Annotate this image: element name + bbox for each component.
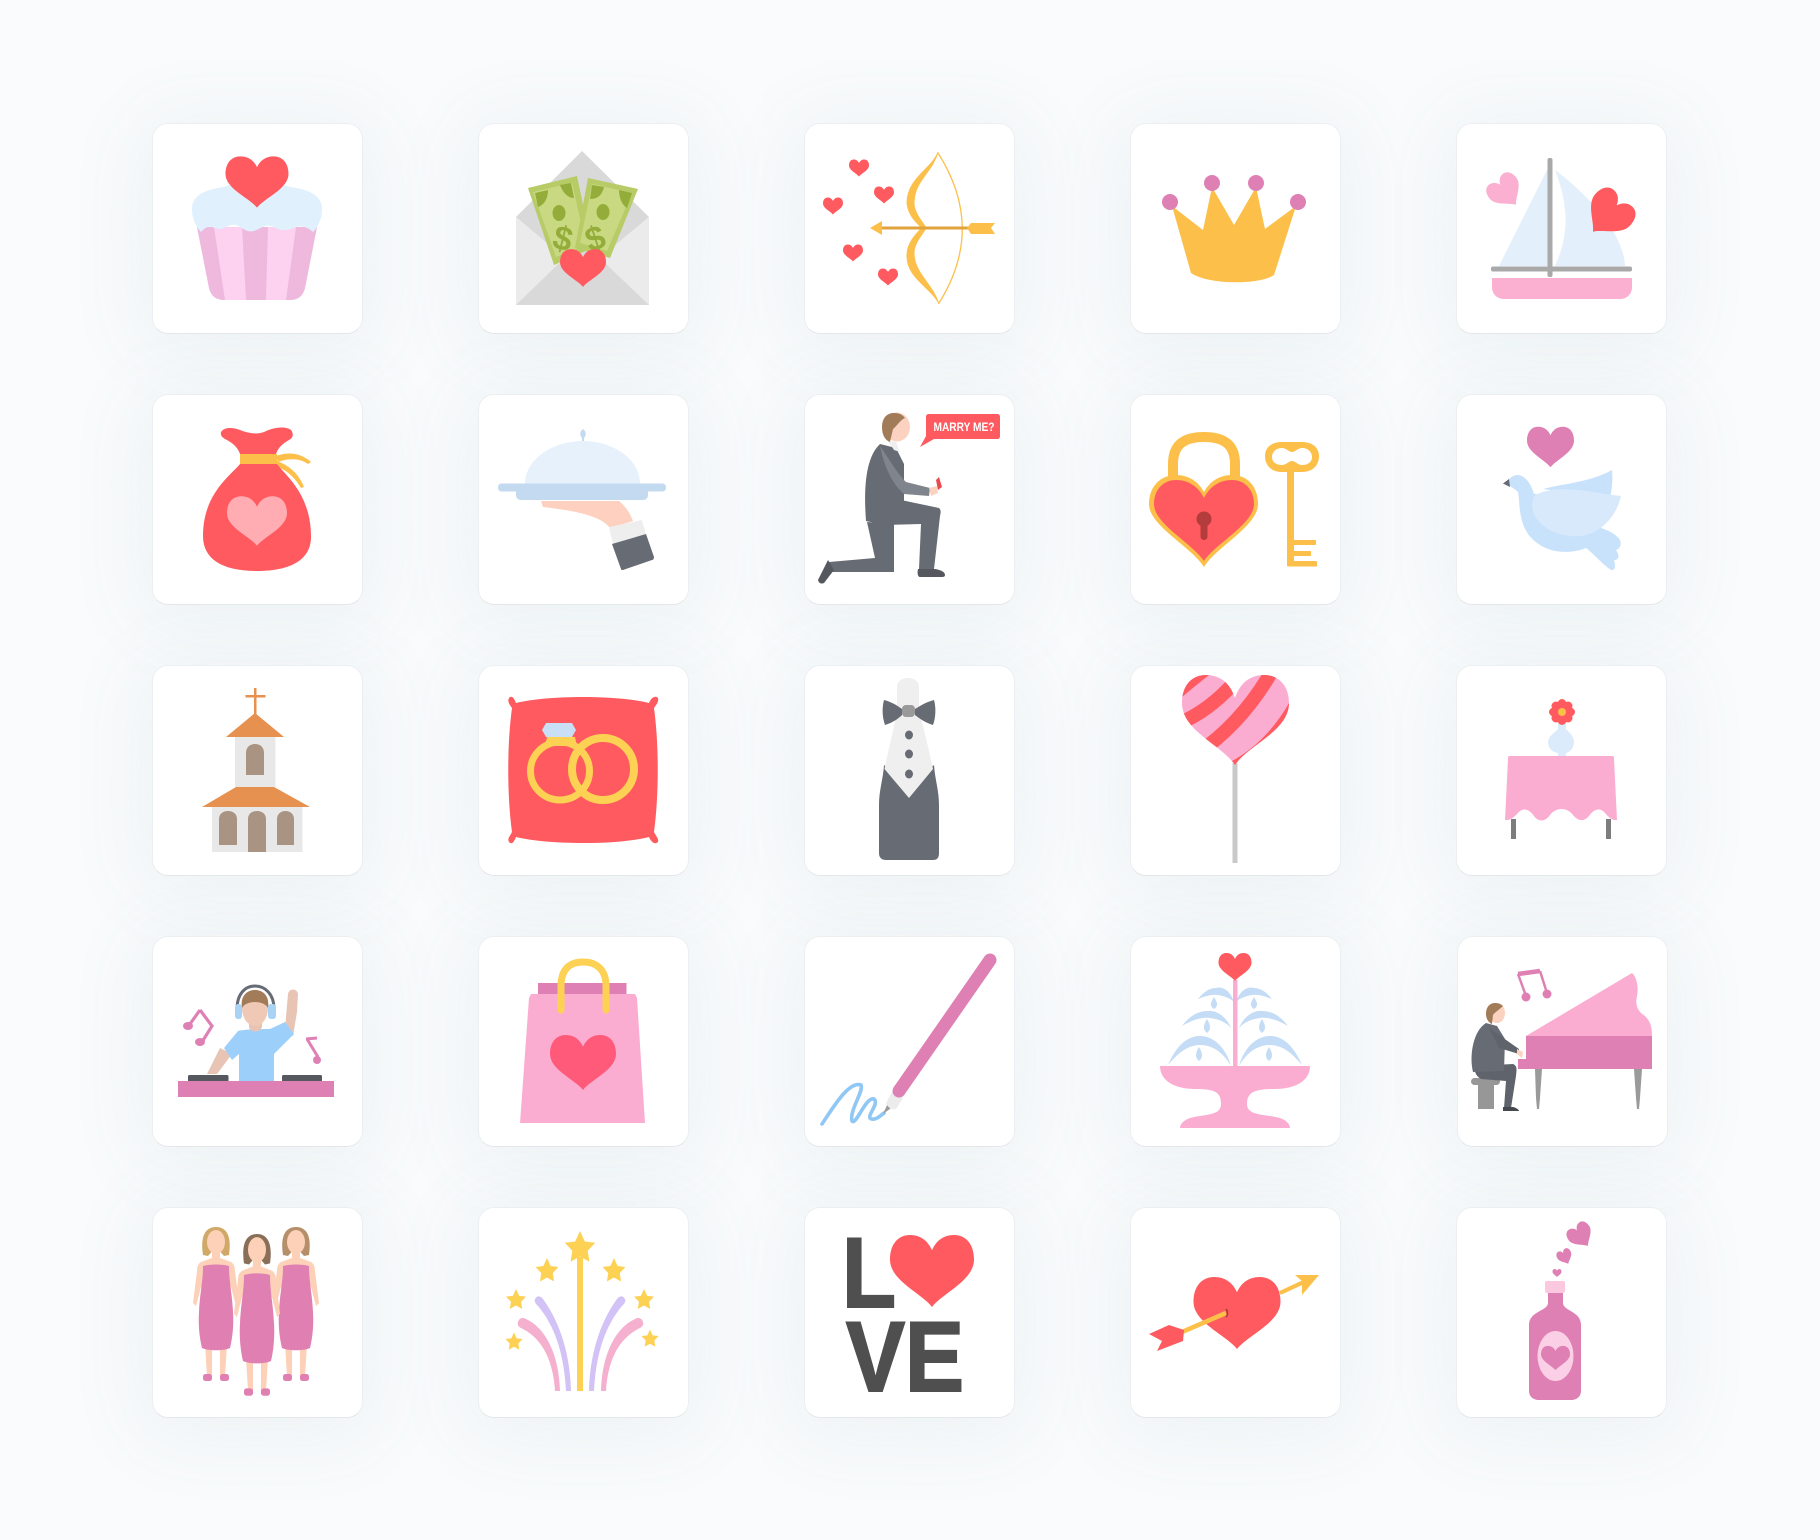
icon: gold crown: [1162, 175, 1306, 282]
panel: bow and arrow card: [804, 123, 1015, 334]
icon: three bridesmaids: [193, 1227, 319, 1396]
panel: shopping bag card: [478, 936, 689, 1147]
icon: envelope with banknotes and heart: [516, 151, 649, 305]
panel: serving tray card: [478, 394, 689, 605]
icon: red bag with heart: [203, 428, 311, 571]
panel: marriage proposal card: [804, 394, 1015, 605]
panel: pierced heart card: [1130, 1207, 1341, 1418]
icon: pianist at grand piano: [1471, 968, 1652, 1111]
panel: fountain card: [1130, 936, 1341, 1147]
icon: heart pierced by arrow: [1149, 1275, 1319, 1351]
panel: tuxedo bottle card: [804, 665, 1015, 876]
icon: DJ with headphones: [178, 984, 334, 1097]
panel: dove card: [1456, 394, 1667, 605]
icon: table with vase: [1505, 699, 1617, 839]
panel: money bag card: [152, 394, 363, 605]
icon: LOVE with heart: [842, 1217, 974, 1412]
panel: love lettering card: [804, 1207, 1015, 1418]
panel: pianist card: [1457, 936, 1668, 1147]
panel: sailboat card: [1456, 123, 1667, 334]
icon: pink bottle with hearts: [1529, 1221, 1591, 1400]
icon: pink shopping bag: [520, 958, 645, 1123]
panel: love potion bottle card: [1456, 1207, 1667, 1418]
icon: envelope with banknotes and heart: $: [580, 218, 610, 260]
icon: kneeling man proposing: [818, 412, 1000, 584]
panel: fireworks card: [478, 1207, 689, 1418]
icon: sailboat with hearts: [1486, 158, 1636, 299]
icon: kneeling man proposing: MARRY ME?: [934, 420, 994, 434]
icon: chocolate fountain with heart: [1160, 953, 1310, 1128]
icon: cupcake with heart: [192, 156, 322, 300]
icon: envelope with banknotes and heart: $: [549, 218, 577, 260]
panel: love lock card: [1130, 394, 1341, 605]
panel: money envelope card: [478, 123, 689, 334]
panel: chapel card: [152, 665, 363, 876]
panel: dining table card: [1456, 665, 1667, 876]
panel: bridesmaids card: [152, 1207, 363, 1418]
icon: fireworks: [506, 1231, 658, 1391]
icon: pen writing signature: [820, 954, 996, 1126]
panel: crown card: [1130, 123, 1341, 334]
icon: rings on red pillow: [508, 696, 658, 844]
icon: heart padlock and key: [1149, 432, 1319, 567]
panel: wedding rings card: [478, 665, 689, 876]
panel: heart lollipop card: [1130, 665, 1341, 876]
panel: cupcake card: [152, 123, 363, 334]
icon: chapel: [202, 688, 310, 852]
icon: striped heart lollipop: [1182, 675, 1289, 863]
icon: cloche on hand: [498, 429, 666, 570]
icon: LOVE with heart: VE: [846, 1301, 964, 1412]
icon: champagne bottle in tuxedo: [879, 678, 939, 860]
icon: cupid bow with hearts: [823, 152, 995, 304]
panel: DJ card: [152, 936, 363, 1147]
icon: dove and heart: [1503, 426, 1621, 570]
panel: pen signature card: [804, 936, 1015, 1147]
icon: LOVE with heart: L: [842, 1217, 896, 1328]
